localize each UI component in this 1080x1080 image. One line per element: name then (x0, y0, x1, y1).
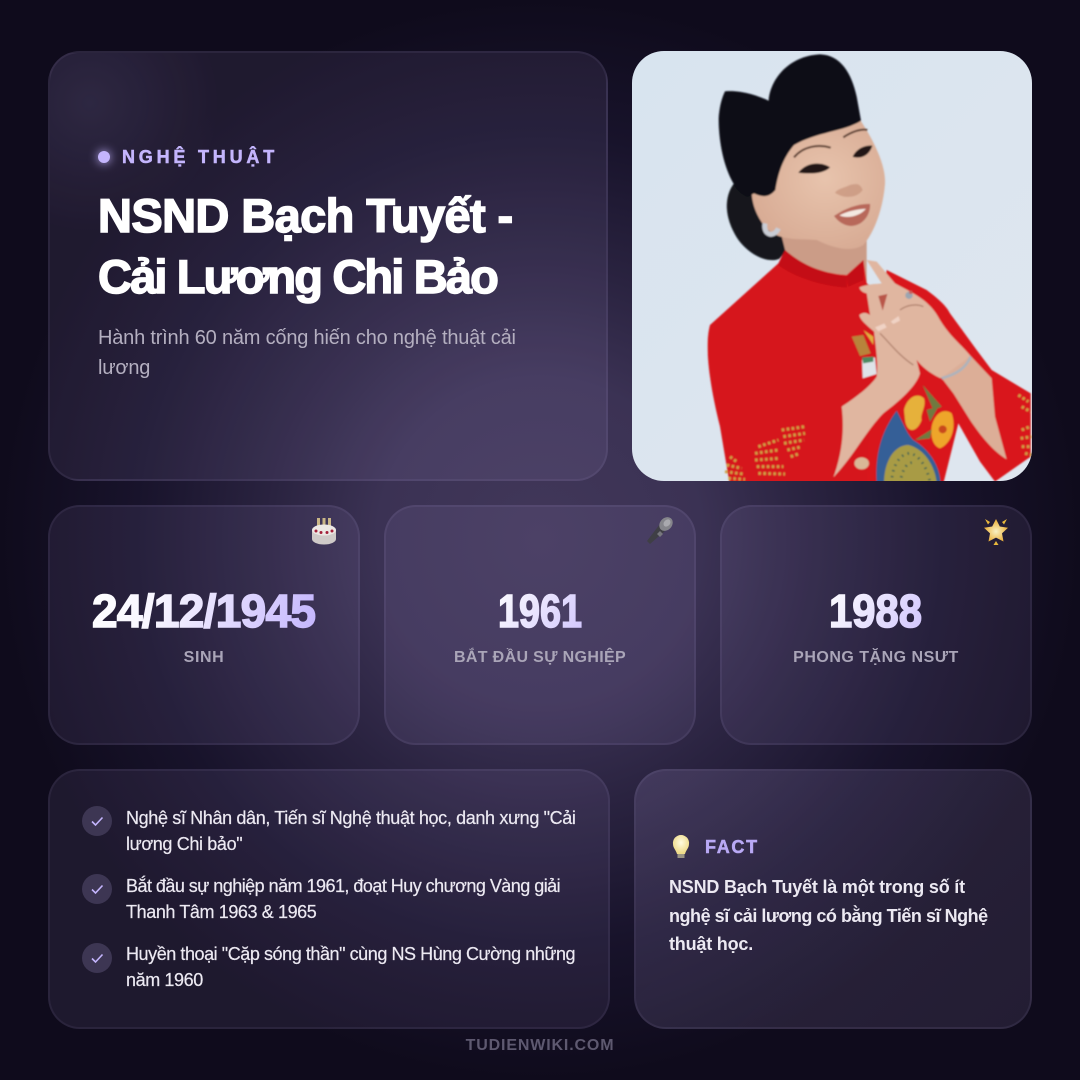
item text: Huyền thoại "Cặp sóng thần" cùng NS Hùng Cường những (126, 944, 575, 964)
item text: Thanh Tâm 1963 & 1965 (126, 902, 316, 922)
tag label: NGHỆ THUẬT (122, 147, 278, 167)
subtitle (98, 327, 516, 379)
fingernails (875, 316, 900, 331)
fact label: FACT (705, 837, 759, 857)
panel: highlights list (48, 769, 610, 1029)
stat card: title award (720, 505, 1032, 745)
chest embroidery (852, 335, 871, 356)
item text (126, 876, 560, 922)
item text (126, 944, 575, 990)
hair bun (727, 183, 790, 260)
icon: microphone (647, 517, 673, 544)
stat label: birth: SINH (184, 649, 224, 666)
tag dot (98, 151, 110, 163)
far forearm (940, 356, 1007, 459)
face (752, 121, 885, 249)
lips (834, 204, 870, 226)
hair (719, 54, 861, 197)
stat label: career: BẮT ĐẦU SỰ NGHIỆP (454, 649, 626, 666)
title heading: Cải Lương Chi Bảo (98, 250, 497, 303)
eyebrows (794, 130, 867, 157)
subtitle: lương (98, 357, 150, 379)
list item 2 (82, 874, 560, 922)
category tag (92, 144, 278, 170)
portrait photo (632, 51, 1032, 481)
footer credit: TUDIENWIKI.COM (466, 1037, 614, 1054)
icon: light bulb (672, 835, 690, 858)
flowers (904, 396, 925, 430)
eyes (798, 146, 872, 173)
stat: birth date: 24/12/1945 (92, 585, 316, 637)
stat label: award: PHONG TẶNG NSƯT (793, 649, 959, 666)
bracelet (942, 357, 971, 378)
panel: title (48, 51, 608, 481)
list item 3 (82, 943, 575, 990)
finger gap (878, 294, 887, 311)
left sleeve sequins (725, 395, 1032, 479)
fact text (669, 877, 988, 954)
dress (708, 250, 1032, 490)
check icon (82, 874, 112, 904)
panel: fact (634, 769, 1032, 1029)
icon: birthday cake (312, 518, 336, 544)
hands and near forearm (833, 260, 971, 477)
item text: lương Chi bảo" (126, 834, 242, 854)
ring (905, 292, 913, 299)
neck (780, 230, 867, 283)
stat: award year: 1988 (829, 585, 922, 637)
button (854, 457, 869, 469)
title heading (98, 189, 513, 304)
item text: năm 1960 (126, 970, 203, 990)
subtitle: Hành trình 60 năm cống hiến cho nghệ thuật cải (98, 327, 516, 349)
fact text: NSND Bạch Tuyết là một trong số ít (669, 877, 965, 897)
stat card: career start (384, 505, 696, 745)
nose (835, 184, 863, 197)
fact text: nghệ sĩ cải lương có bằng Tiến sĩ Nghệ (669, 906, 988, 926)
list item 1 (82, 806, 576, 854)
check icon (82, 806, 112, 836)
item text: Bắt đầu sự nghiệp năm 1961, đoạt Huy chương Vàng giải (126, 876, 560, 896)
fact text: thuật học. (669, 934, 753, 954)
icon: glowing star (984, 519, 1008, 545)
collar (778, 250, 863, 287)
check icon (82, 943, 112, 973)
stat card: birth (48, 505, 360, 745)
peacock (876, 411, 941, 483)
title heading: NSND Bạch Tuyết - (98, 189, 513, 242)
item text (126, 808, 576, 854)
earring (765, 223, 778, 234)
item text: Nghệ sĩ Nhân dân, Tiến sĩ Nghệ thuật học, danh xưng "Cải (126, 808, 576, 828)
